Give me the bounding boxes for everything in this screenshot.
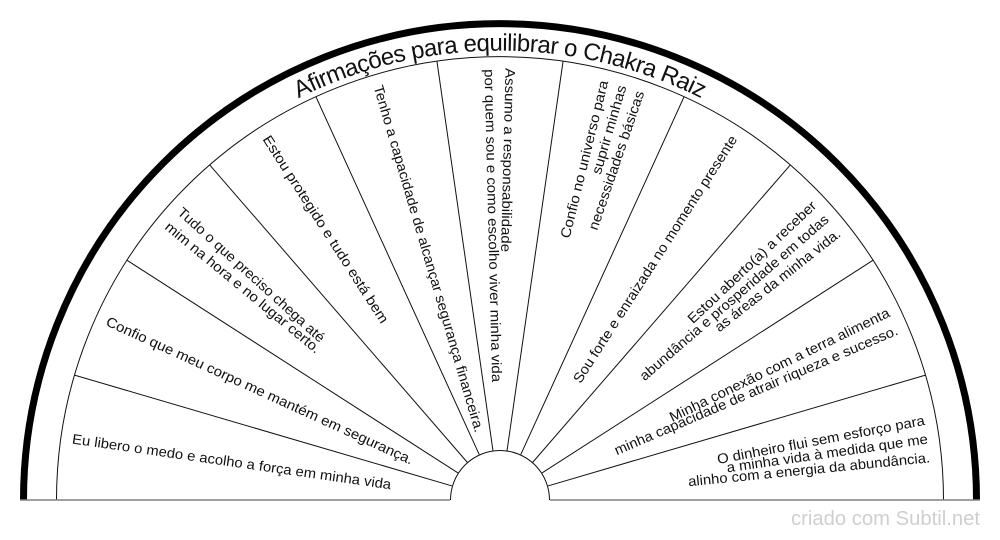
sector 2 text: Confio que meu corpo me mantém em segurança. <box>104 313 416 467</box>
sector 10 text: Minha conexão com a terra alimenta <box>667 304 892 425</box>
sector 11 text: alinho com a energia da abundância. <box>687 449 931 489</box>
wheel of sectors <box>56 57 944 500</box>
footer credit: criado com Subtil.net <box>791 508 980 530</box>
sector 6 text: por quem sou e como escolho viver minha vida <box>481 69 505 382</box>
sector 7 text <box>557 78 647 240</box>
sector 6 text: Assumo a responsabilidade <box>498 68 519 252</box>
sector 7 text: suprir minhas <box>588 83 629 176</box>
sector 3 text: mim na hora e no lugar certo. <box>162 218 324 356</box>
sector 11 text: O dinheiro flui sem esforço para <box>716 412 926 467</box>
sector 11 text <box>687 412 931 489</box>
base line <box>20 499 980 501</box>
sector 5 text: Tenho a capacidade de alcançar segurança financeira. <box>371 83 488 434</box>
sector 7 text: Confio no universo para <box>557 78 611 240</box>
sector 3 text: Tudo o que preciso chega até <box>175 204 329 345</box>
sector 8 text: Sou forte e enraizada no momento presente <box>570 132 740 386</box>
title: Afirmações para equilibrar o Chakra Raiz <box>297 33 706 98</box>
sector 9 text: Estou aberto(a) a receber <box>684 197 820 326</box>
sector 10 text: minha capacidade de atrair riqueza e sucesso. <box>612 322 900 458</box>
sector 4 text: Estou protegido e tudo está bem <box>260 132 392 326</box>
sector 11 text: a minha vida à medida que me <box>726 431 929 475</box>
sector 9 text: abundância e prosperidade em todas <box>636 211 832 384</box>
sector 6 text <box>481 68 519 382</box>
sector 1 text: Eu libero o medo e acolho a força em minha vida <box>71 431 392 492</box>
sector 7 text: necessidades básicas <box>585 89 647 232</box>
sector 9 text: as áreas da minha vida. <box>711 225 843 335</box>
